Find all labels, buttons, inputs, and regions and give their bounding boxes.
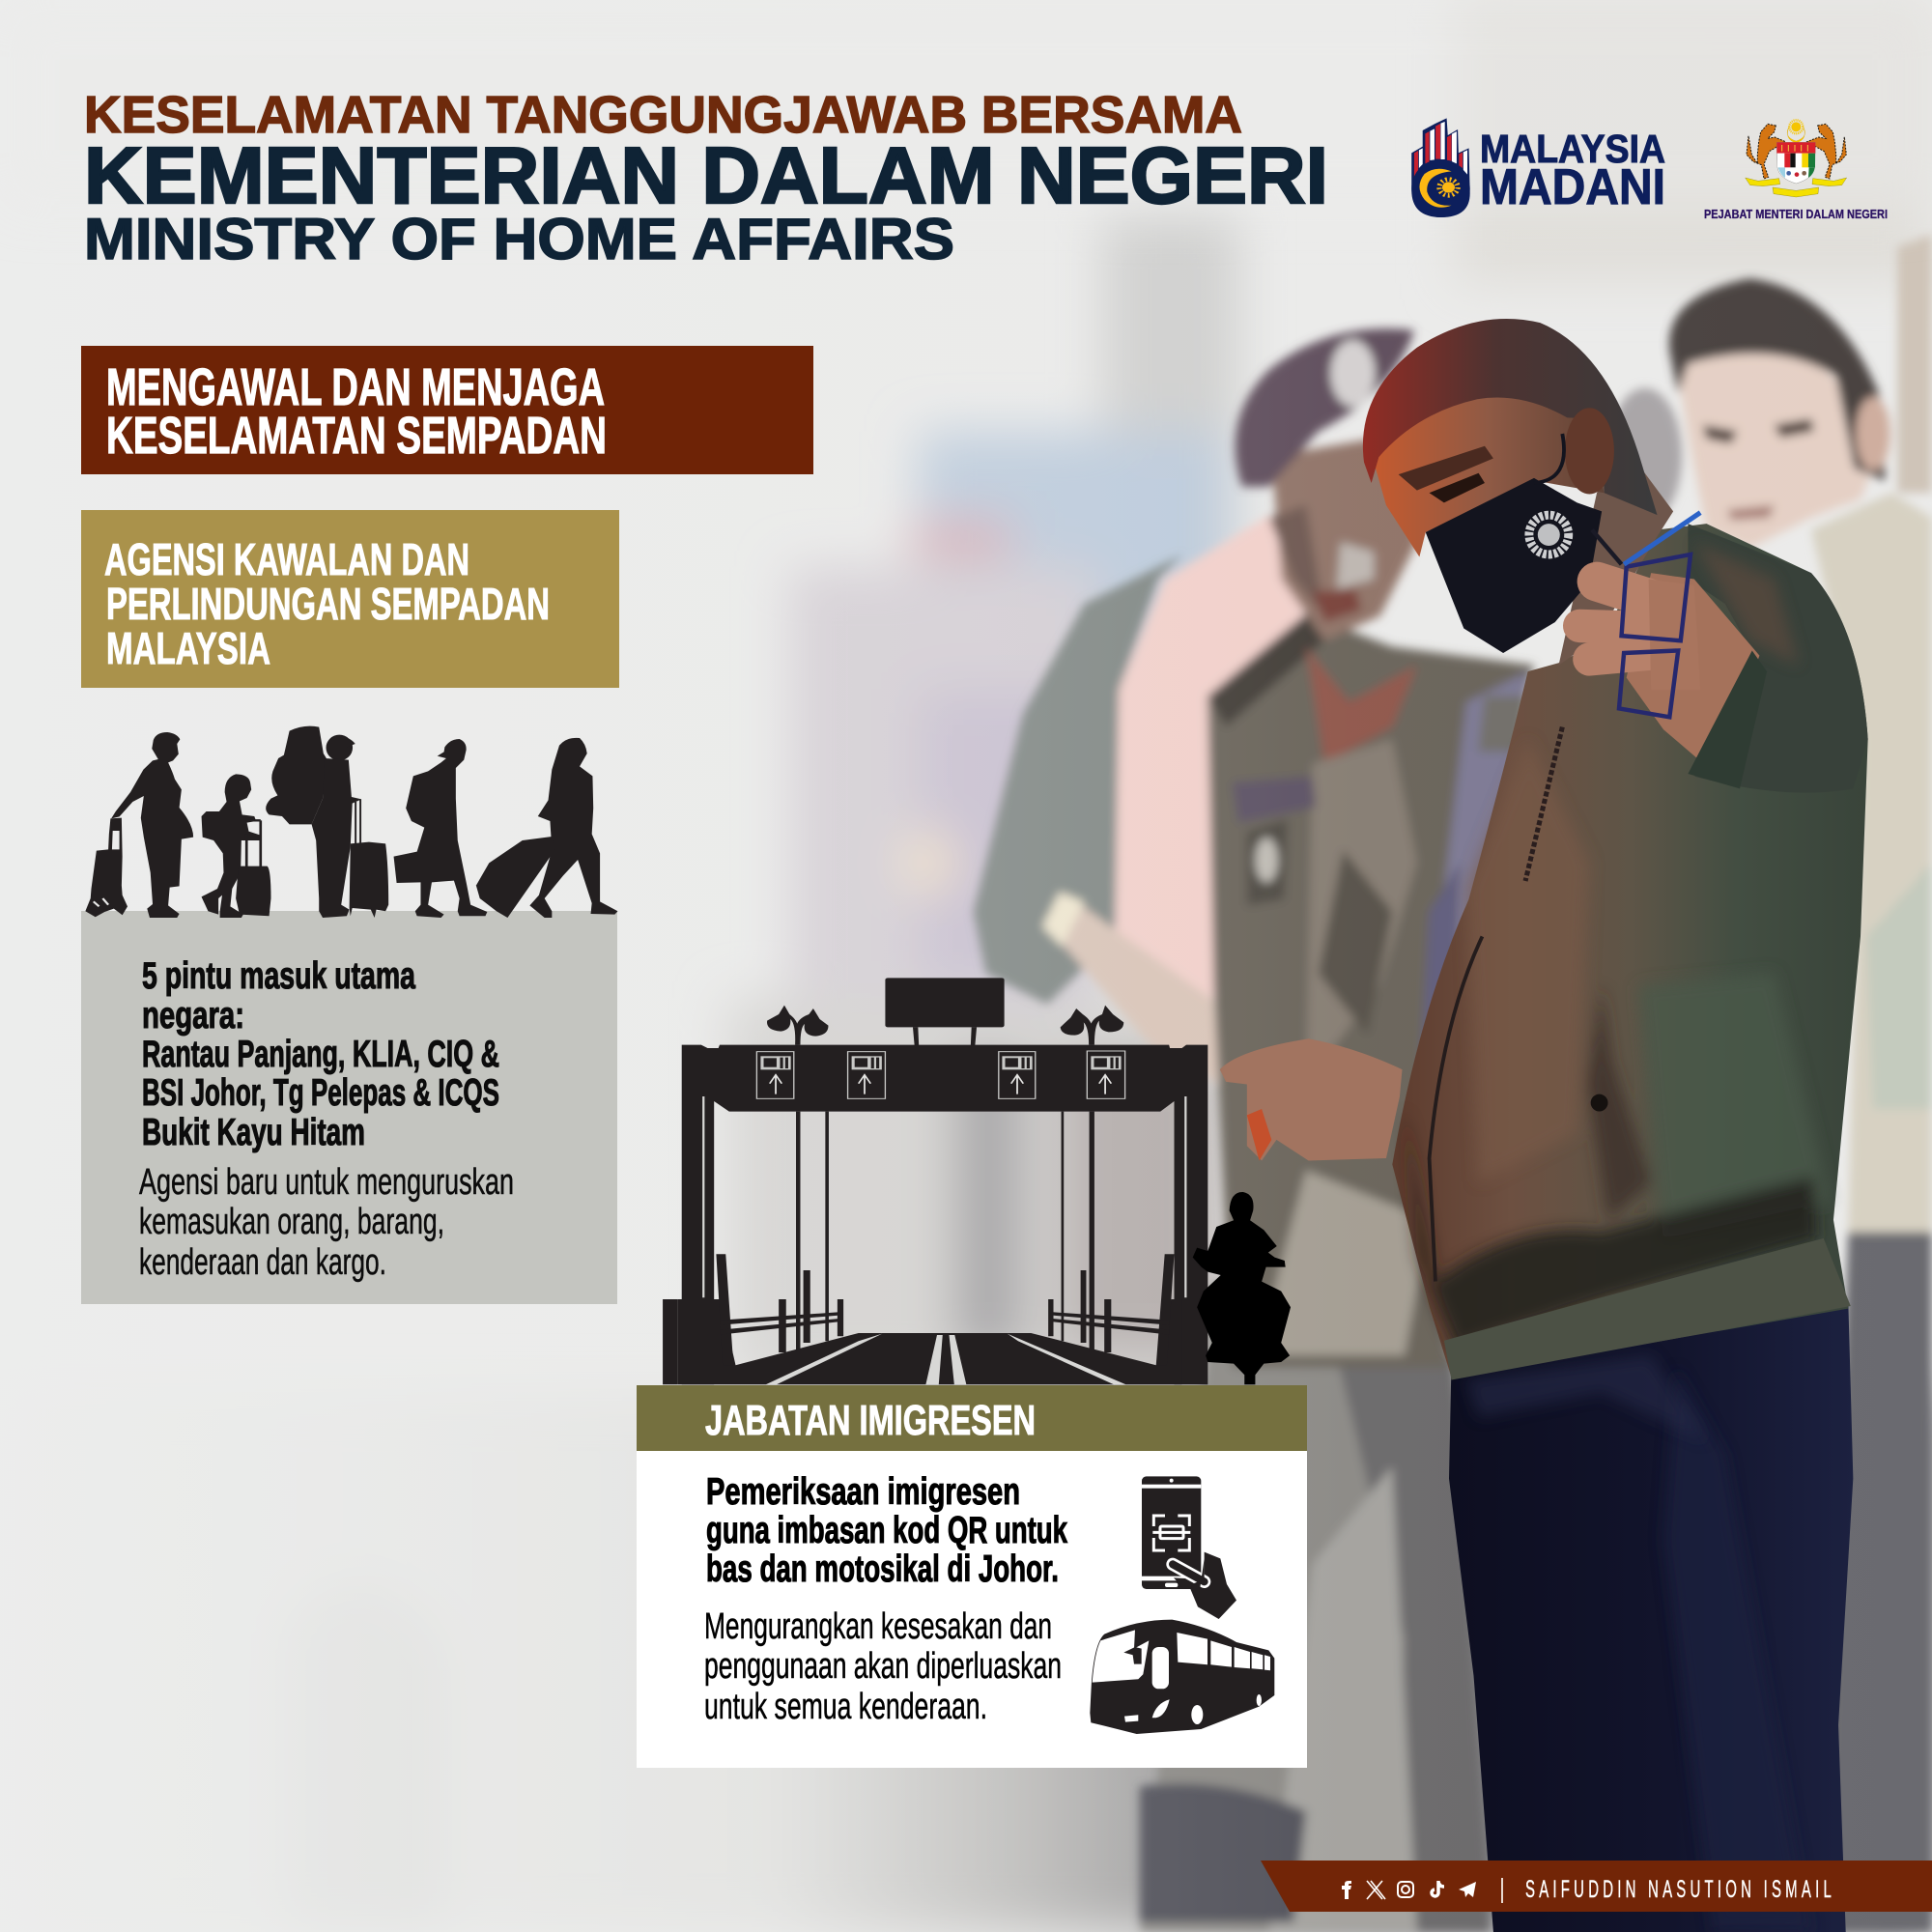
title line: kementerian dalam negeri: KEMENTERIAN DALAM NEGERI <box>84 130 1328 220</box>
jacket hem <box>1444 1238 1851 1380</box>
agency heading text: PERLINDUNGAN SEMPADAN <box>106 579 550 629</box>
agency heading text <box>104 534 550 673</box>
right sleeve <box>1688 524 1868 793</box>
pink shirt <box>1115 515 1309 1005</box>
woman with wheeled duffel <box>529 738 617 918</box>
hair <box>1363 319 1658 515</box>
footer: social handle bar <box>1261 1861 1932 1912</box>
icon: hand with flag stripes <box>1411 118 1470 217</box>
tigers <box>1747 124 1846 179</box>
bold text: entry points: Bukit Kayu Hitam <box>142 1112 365 1153</box>
crescent and star <box>1787 126 1805 143</box>
panel: Jabatan Imigresen <box>637 1385 1307 1768</box>
bold text: QR scan <box>706 1471 1067 1590</box>
forearm with cuff <box>1047 897 1220 1084</box>
child with suitcase <box>202 774 262 918</box>
neck <box>1559 462 1673 666</box>
title line: ministry of home affairs: MINISTRY OF HOME AFFAIRS <box>84 207 954 271</box>
heading text: KESELAMATAN SEMPADAN <box>106 407 607 465</box>
soldier lower body <box>1140 1282 1485 1932</box>
forearm <box>1627 573 1759 774</box>
bold text: QR scan: Pemeriksaan imigresen <box>706 1471 1020 1513</box>
panel: main heading <box>81 346 813 474</box>
body text: new agency: kenderaan dan kargo. <box>139 1242 386 1283</box>
street lamps <box>767 1006 1123 1045</box>
woman with shopping trolley <box>111 732 193 918</box>
wordmark: MALAYSIA <box>1480 127 1665 171</box>
body text: congestion: Mengurangkan kesesakan dan <box>704 1606 1052 1647</box>
illustration: border toll gate <box>663 978 1291 1384</box>
mask <box>1426 478 1602 653</box>
panel: five entry points <box>81 911 617 1304</box>
right person <box>1811 493 1932 1244</box>
panel: agency heading <box>81 510 619 688</box>
bold text: entry points: 5 pintu masuk utama <box>142 955 415 997</box>
pointing hand <box>1220 1038 1403 1161</box>
jacket of left person <box>974 554 1182 1005</box>
photo: minister pointing in bomber jacket and face mask <box>1220 319 1868 1932</box>
face <box>1372 393 1605 557</box>
body text: new agency: Agensi baru untuk menguruskan <box>139 1162 514 1203</box>
icon: bus <box>1090 1620 1274 1734</box>
panel header: JABATAN IMIGRESEN <box>705 1397 1036 1444</box>
motto ribbon <box>1746 178 1847 186</box>
person behind <box>1608 388 1682 524</box>
logo: coat of arms with office name <box>1704 120 1888 221</box>
body text: congestion: untuk semua kenderaan. <box>704 1687 987 1727</box>
agency heading text: AGENSI KAWALAN DAN <box>104 534 469 584</box>
bold text: entry points: Rantau Panjang, KLIA, CIQ & <box>142 1034 499 1075</box>
jacket <box>1392 524 1868 1378</box>
light gaps and road markings <box>702 1096 1186 1384</box>
wordmark <box>1480 127 1665 215</box>
title block <box>84 86 1328 271</box>
heading text <box>106 358 607 465</box>
name: SAIFUDDIN NASUTION ISMAIL <box>1525 1876 1832 1903</box>
body text: congestion <box>704 1606 1062 1727</box>
agency heading text: MALAYSIA <box>106 623 270 673</box>
icon: phone with QR scan <box>1142 1476 1236 1619</box>
office name: PEJABAT MENTERI DALAM NEGERI <box>1704 207 1888 221</box>
shopping trolley <box>85 818 128 917</box>
bold text: entry points <box>142 955 499 1153</box>
social icons <box>1342 1881 1476 1899</box>
soldier head <box>1271 431 1417 640</box>
motorcycle rider <box>1193 1192 1291 1384</box>
icon: travellers silhouettes <box>85 726 617 918</box>
road and structure <box>663 978 1208 1384</box>
eye and brow <box>1399 446 1493 491</box>
bold text: QR scan: guna imbasan kod QR untuk <box>706 1510 1067 1551</box>
bold text: entry points: BSI Johor, Tg Pelepas & ICQS <box>142 1072 499 1114</box>
backpacker with suitcase <box>266 726 327 824</box>
woman with hand luggage <box>394 739 487 918</box>
panel header <box>637 1385 1307 1451</box>
camo uniform <box>1208 613 1534 1368</box>
ear <box>1565 408 1614 494</box>
wordmark: MADANI <box>1480 159 1665 215</box>
jacket folds <box>1405 739 1830 1350</box>
body text: new agency: kemasukan orang, barang, <box>139 1202 444 1242</box>
raised hand <box>1579 582 1665 659</box>
lane signs <box>756 1051 1125 1098</box>
shield <box>1776 142 1815 184</box>
title line: keselamatan tanggungjawab bersama: KESELAMATAN TANGGUNGJAWAB BERSAMA <box>84 86 1242 144</box>
body text: congestion: penggunaan akan diperluaskan <box>704 1646 1062 1687</box>
bold text: entry points: negara: <box>142 995 244 1037</box>
heading text: MENGAWAL DAN MENJAGA <box>106 358 605 416</box>
logo: Malaysia Madani <box>1411 118 1665 217</box>
zip <box>1525 727 1562 881</box>
trousers <box>1449 1300 1853 1932</box>
bold text: QR scan: bas dan motosikal di Johor. <box>706 1548 1059 1590</box>
glasses <box>1592 513 1700 717</box>
body text: new agency <box>139 1162 514 1283</box>
